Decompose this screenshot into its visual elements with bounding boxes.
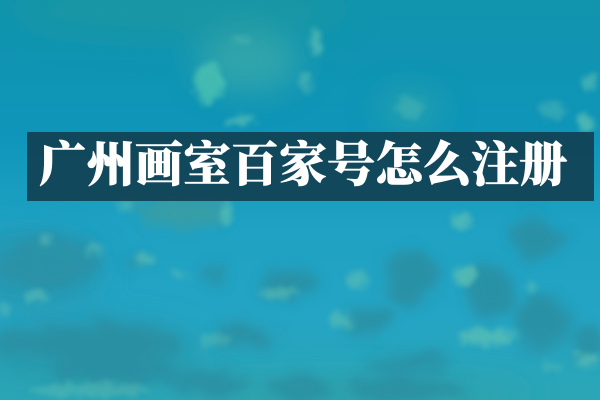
title band [27,132,594,201]
title: 广州画室百家号怎么注册 [39,126,567,195]
